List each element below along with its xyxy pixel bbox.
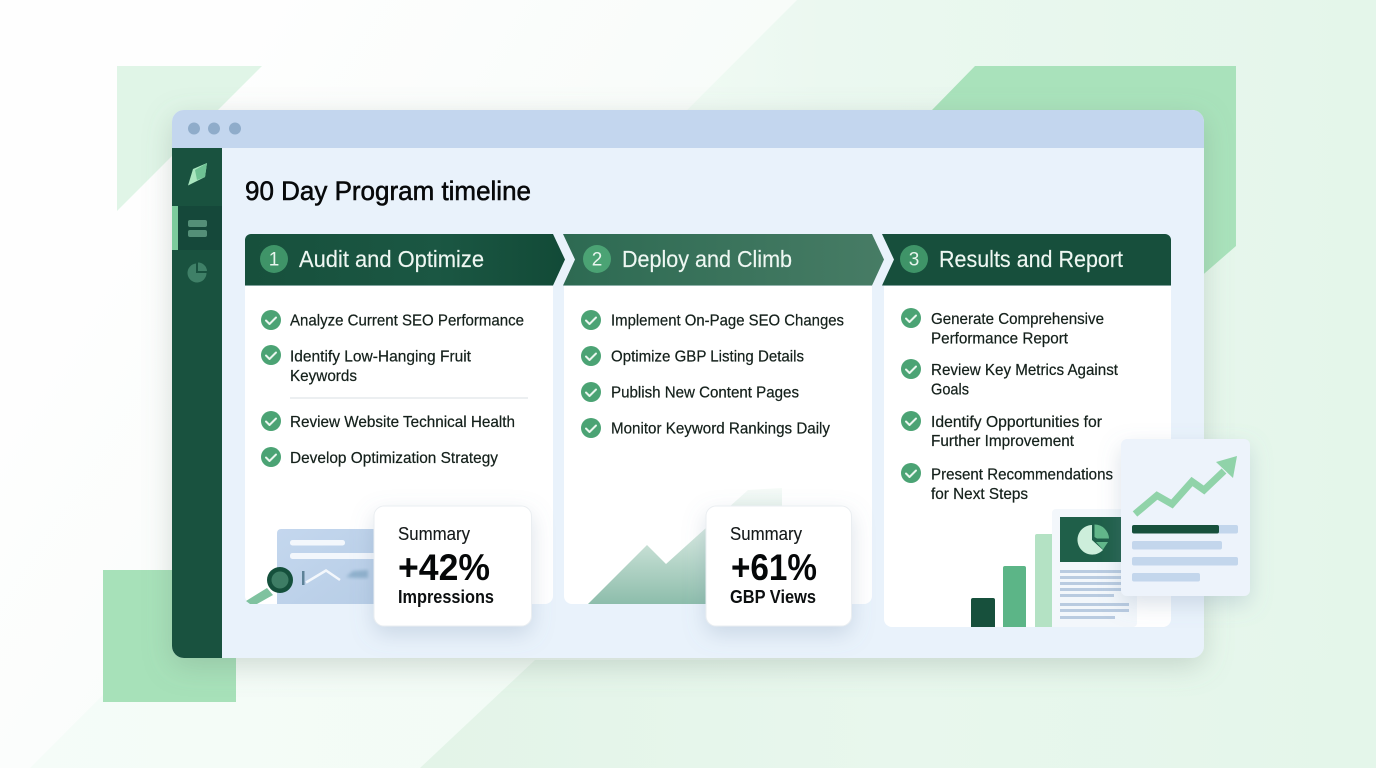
summary card (374, 506, 532, 626)
sidebar active item (172, 206, 222, 250)
checklist: Identify Low-Hanging Fruit (290, 348, 472, 366)
checklist: Analyze Current SEO Performance (290, 312, 524, 330)
checklist: Develop Optimization Strategy (290, 450, 498, 467)
summary card: +61% (731, 547, 817, 588)
summary card: GBP Views (730, 587, 816, 607)
checklist: Keywords (290, 368, 357, 385)
checklist: Review Key Metrics Against (931, 362, 1119, 379)
panel: step 3 results and report (882, 234, 1171, 627)
checklist: Monitor Keyword Rankings Daily (611, 420, 830, 438)
checklist: Implement On-Page SEO Changes (611, 312, 844, 330)
icon: leaf logo (188, 163, 207, 186)
checklist: Goals (931, 382, 969, 398)
decorative shape: top right (932, 66, 1236, 286)
checklist: Further Improvement (931, 433, 1075, 450)
panel body (245, 286, 553, 604)
report document (1052, 509, 1137, 627)
summary card: Impressions (398, 587, 494, 607)
summary card: Summary (398, 524, 470, 544)
step header (245, 234, 565, 286)
browser window (172, 110, 1204, 658)
step header: Results and Report (939, 246, 1124, 272)
step header (882, 234, 1171, 286)
chart: rising mountain area (588, 488, 782, 604)
step header: 1 (269, 250, 279, 270)
checklist (261, 310, 528, 467)
checklist: for Next Steps (931, 486, 1028, 503)
summary card: +42% (398, 547, 490, 588)
sidebar (172, 148, 222, 658)
checklist: Publish New Content Pages (611, 384, 799, 402)
step header (563, 234, 884, 286)
step header: Audit and Optimize (299, 246, 484, 272)
arrow: growth trend (1135, 456, 1237, 514)
checklist (581, 310, 844, 438)
checklist: Optimize GBP Listing Details (611, 348, 804, 366)
checklist: Present Recommendations (931, 466, 1113, 484)
illustration: search over page (246, 529, 380, 604)
checklist (901, 308, 1119, 503)
step header: Deploy and Climb (622, 246, 792, 272)
checklist: Generate Comprehensive (931, 311, 1104, 328)
title: 90 Day Program timeline (245, 176, 531, 206)
summary card: Summary (730, 524, 802, 544)
floating growth card (1121, 439, 1250, 596)
panel: step 1 audit and optimize (245, 234, 565, 626)
panel: step 2 deploy and climb (563, 234, 884, 626)
progress bars (1132, 525, 1238, 582)
icon: pie chart (188, 262, 207, 282)
icon: pie chart (1077, 524, 1109, 555)
decorative square: bottom left (103, 570, 236, 702)
step header: 3 (909, 250, 919, 270)
step header: 2 (592, 250, 602, 270)
title bar (172, 110, 1204, 148)
bar chart (971, 534, 1054, 627)
checklist: Identify Opportunities for (931, 414, 1103, 431)
decorative square: top left (117, 66, 262, 211)
checklist: Performance Report (931, 330, 1069, 348)
panel body (564, 286, 872, 604)
panel body (884, 286, 1171, 627)
checklist: Review Website Technical Health (290, 414, 515, 431)
summary card (706, 506, 852, 626)
